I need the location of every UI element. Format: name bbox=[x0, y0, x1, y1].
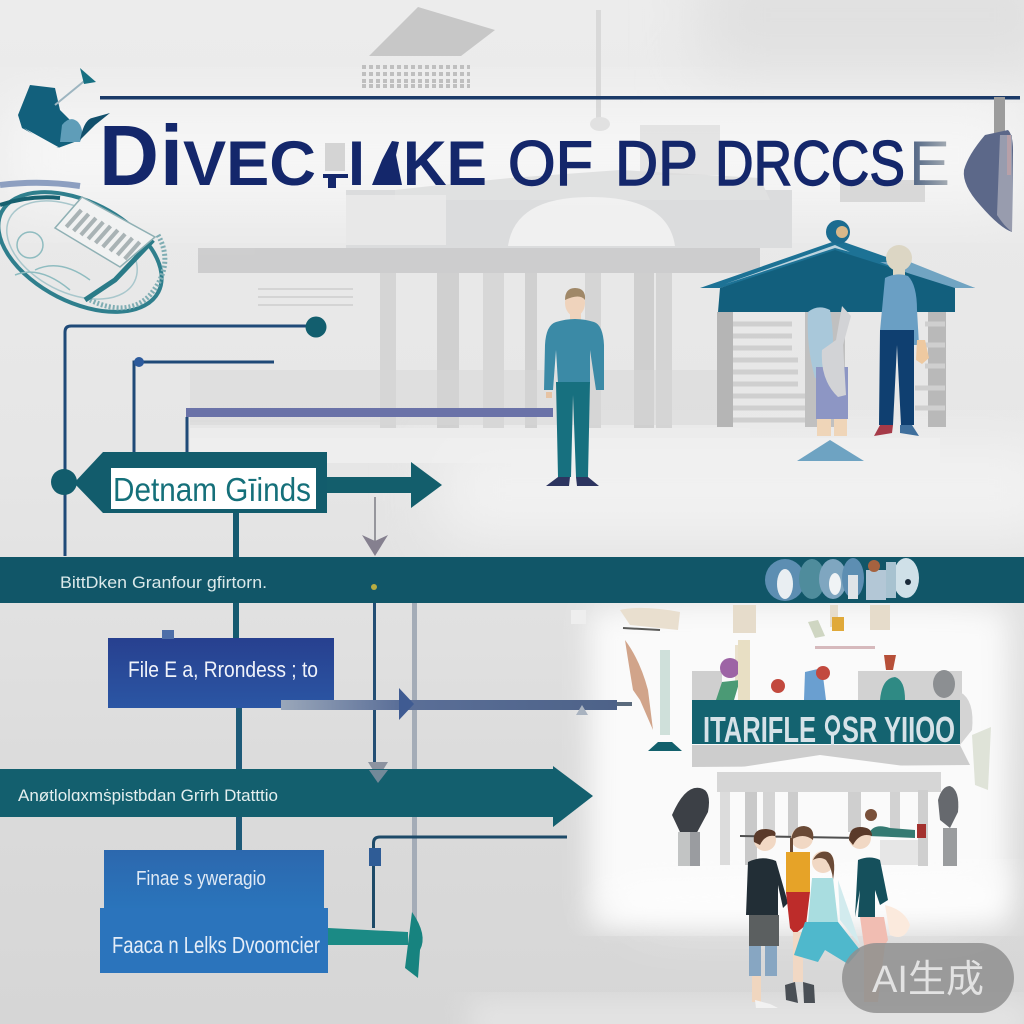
title rule bbox=[100, 96, 1020, 100]
person: woman with scarf bbox=[808, 306, 851, 436]
person: woman in yellow and red bbox=[785, 826, 815, 1003]
band arrow: second teal strip bbox=[0, 766, 593, 827]
icon: stamp with document bbox=[0, 167, 181, 337]
people group bbox=[746, 826, 910, 1008]
icon: teal house bbox=[700, 220, 975, 427]
upper panel bbox=[104, 850, 324, 908]
band text: BittDken Granfour gfirtorn. bbox=[60, 573, 267, 592]
lower panel bbox=[100, 908, 328, 973]
person: older man in blue bbox=[874, 245, 929, 436]
label box bbox=[111, 468, 316, 509]
title: OF bbox=[508, 129, 593, 199]
arrow: horizontal bar to right bbox=[281, 688, 632, 720]
icon: hanging shield top right bbox=[964, 97, 1013, 232]
lower text: Faaca n Lelks Dvoomcier bbox=[112, 932, 320, 958]
lower building: balcony and people bbox=[692, 640, 962, 701]
box: File E a, Rrondess bbox=[108, 630, 334, 708]
box text: File E a, Rrondess ; to bbox=[128, 657, 318, 682]
callout banner: Detnam Gtinds bbox=[51, 452, 327, 513]
person: girl in aqua bbox=[794, 851, 860, 964]
person: man in teal sweater bbox=[849, 827, 910, 1002]
person: man with teal sweater bbox=[544, 288, 604, 486]
portrait strip bbox=[765, 558, 919, 601]
lower building: facade bbox=[672, 727, 991, 866]
icon: small triangle plinth bbox=[797, 440, 864, 461]
flow line: lower bracket bbox=[369, 837, 567, 928]
title: I bbox=[348, 129, 365, 199]
ribbon sign bbox=[692, 692, 972, 750]
title: KE bbox=[403, 129, 487, 199]
connector: banner to band bbox=[233, 513, 239, 643]
label text: Detnam Gīinds bbox=[113, 471, 311, 508]
connector: box to arrow band bbox=[236, 708, 242, 863]
badge: AI generated bbox=[842, 943, 1014, 1013]
flow line: second connector bbox=[134, 357, 274, 452]
arrow: teal from lower panel bbox=[328, 912, 423, 978]
title: E bbox=[909, 129, 950, 199]
vertical line: grey bbox=[412, 603, 417, 953]
background: faded capitol building bbox=[190, 7, 940, 463]
arrow: right from banner bbox=[327, 462, 442, 508]
flow line: purple bar bbox=[186, 408, 553, 453]
thin arrow into band bbox=[362, 497, 388, 556]
title: i bbox=[160, 109, 183, 204]
band arrow text: Anøtlolɑxmṡpistbdan Grīrh Dtatttio bbox=[18, 786, 278, 805]
box: lower double panel bbox=[100, 850, 328, 973]
flow line: top connector with node bbox=[65, 316, 326, 556]
badge text: AI生成 bbox=[872, 959, 984, 1001]
title: D bbox=[99, 109, 159, 204]
small down arrow head bbox=[369, 770, 388, 783]
upper text: Finae s yweragio bbox=[136, 868, 266, 890]
title: DP bbox=[615, 129, 698, 199]
band dot bbox=[371, 584, 377, 590]
title: DRCCS bbox=[715, 129, 905, 199]
band: first teal strip bbox=[0, 557, 1024, 603]
title bbox=[99, 109, 950, 204]
fragments above lower building bbox=[571, 605, 890, 751]
title: VEC bbox=[183, 129, 316, 199]
icon: teal book with brush bbox=[18, 68, 110, 148]
person: man in dark jumper bbox=[746, 829, 788, 1008]
vertical line: dark bbox=[368, 603, 388, 778]
